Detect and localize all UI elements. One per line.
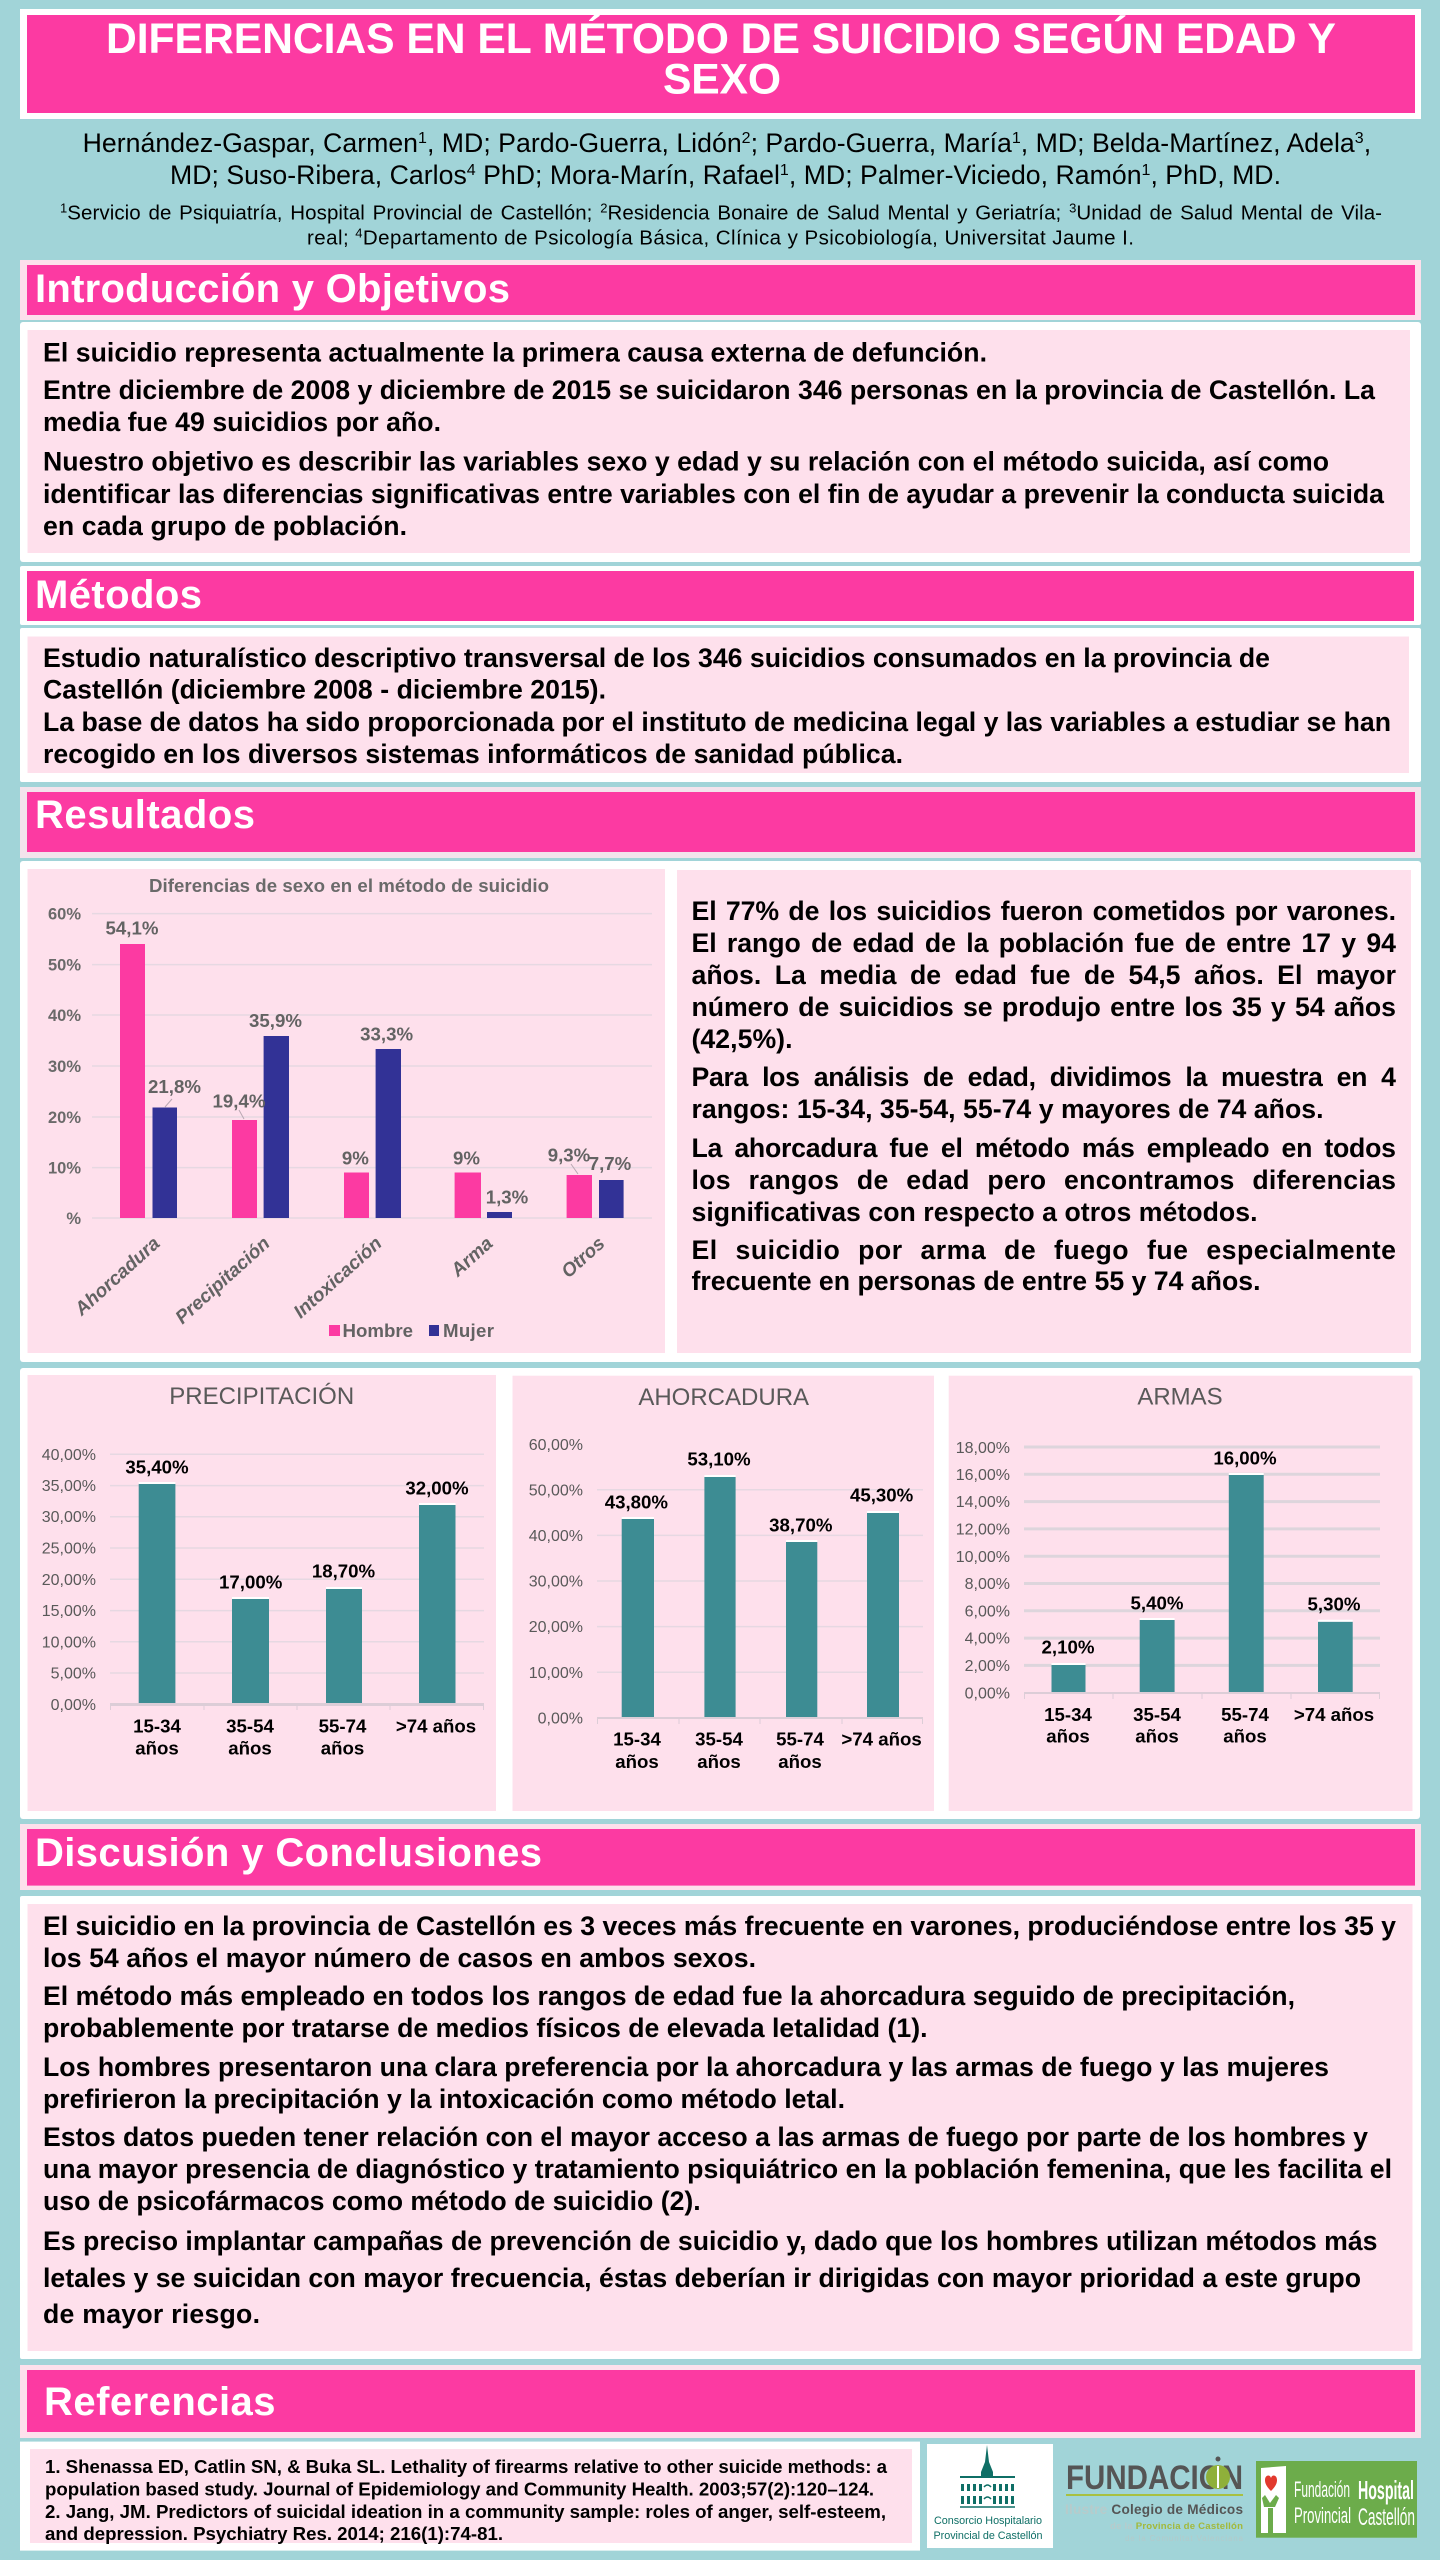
bars: hombre: [120, 944, 592, 1218]
authors: 1: [418, 130, 427, 147]
data labels: [125, 1456, 469, 1592]
y axis labels: 0,00%: [538, 1710, 583, 1728]
y axis labels: 20%: [48, 1109, 81, 1127]
heading: Introducción y Objetivos: [20, 260, 1421, 320]
authors: 1: [1012, 130, 1021, 147]
category labels: 35-54: [226, 1716, 274, 1736]
panel: introducción: media fue 49 suicidios por año.: [43, 407, 441, 437]
panel: discusión: letales y se suicidan con mayor frecuencia, éstas deberían ir dirigidas con mayor prioridad a este grupo: [43, 2263, 1361, 2293]
category labels: 55-74: [776, 1728, 824, 1750]
text block: resultados: los rangos de edad pero encontramos diferencias: [692, 1165, 1396, 1195]
panel: introducción: en cada grupo de población.: [43, 511, 407, 541]
category labels: [70, 1233, 609, 1329]
heading: Métodos: [20, 566, 1421, 625]
data labels: 2,10%: [1042, 1636, 1095, 1658]
panel: referencias: 1. Shenassa ED, Catlin SN, & Buka SL. Lethality of firearms relative to other suicide methods: a: [45, 2456, 888, 2477]
category labels: Otros: [558, 1233, 609, 1283]
authors: , MD; Belda-Martínez, Adela: [1021, 128, 1355, 158]
text block: resultados: (42,5%).: [692, 1024, 792, 1054]
category labels: Intoxicación: [290, 1233, 386, 1323]
data labels: 5,30%: [1308, 1594, 1361, 1614]
legend: [329, 1320, 494, 1341]
title banner: [20, 9, 1421, 119]
heading: Introducción y Objetivos: Introducción y Objetivos: [35, 267, 510, 311]
category labels: años: [697, 1751, 741, 1772]
data labels: 32,00%: [405, 1478, 469, 1498]
authors: , MD; Palmer-Viciedo, Ramón: [789, 160, 1142, 190]
y axis labels: 50,00%: [529, 1482, 583, 1500]
affiliations: Residencia Bonaire de Salud Mental y Geriatría;: [607, 202, 1069, 224]
data labels: 21,8%: [148, 1076, 201, 1097]
bar chart: diferencias de sexo: [28, 869, 665, 1353]
category labels: [613, 1728, 922, 1772]
data labels: 1,3%: [486, 1186, 529, 1208]
panel: referencias: [20, 2442, 920, 2551]
authors: [83, 128, 1371, 190]
panel: introducción: Entre diciembre de 2008 y diciembre de 2015 se suicidaron 346 personas en la provincia de Castellón. La: [43, 375, 1375, 405]
data labels: 43,80%: [605, 1492, 668, 1512]
authors: Hernández-Gaspar, Carmen: [83, 128, 418, 158]
y axis labels: 4,00%: [965, 1630, 1010, 1648]
data labels: [605, 1448, 914, 1536]
panel: referencias: population based study. Journal of Epidemiology and Community Health. 2003;57(2):120–124.: [45, 2478, 874, 2500]
category labels: 55-74: [319, 1716, 367, 1736]
panel: discusión: El método más empleado en todos los rangos de edad fue la ahorcadura seguido de precipitación,: [43, 1981, 1295, 2011]
y axis labels: 10%: [48, 1160, 81, 1178]
authors: 3: [1355, 130, 1364, 147]
logo: Fundación Hospital Provincial Castellón: Fundación: [1294, 2477, 1350, 2502]
panel: discusión: Los hombres presentaron una clara preferencia por la ahorcadura y las armas de fuego y las mujeres: [43, 2052, 1329, 2082]
panel: resultados background: [20, 861, 1421, 1362]
logo: Fundación Colegio de Médicos: [1065, 2456, 1244, 2543]
y axis labels: 8,00%: [965, 1576, 1010, 1593]
y axis labels: 40,00%: [529, 1528, 583, 1545]
heading: Resultados: Resultados: [35, 793, 255, 837]
y axis labels: 10,00%: [529, 1665, 583, 1682]
bars: [139, 1483, 455, 1704]
text block: resultados: [677, 870, 1411, 1353]
data labels: 17,00%: [219, 1572, 283, 1592]
y axis labels: 20,00%: [529, 1619, 583, 1636]
panel: introducción: Nuestro objetivo es describir las variables sexo y edad y su relación con el método suicida, así como: [43, 446, 1329, 476]
category labels: Arma: [446, 1233, 498, 1282]
data labels: 9,3%: [548, 1144, 591, 1166]
panel: armas chart: [949, 1376, 1412, 1811]
affiliations: 1: [60, 200, 67, 216]
chart title: PRECIPITACIÓN: [169, 1383, 354, 1410]
text block: resultados: número de suicidios se produjo entre los 35 y 54 años: [692, 992, 1396, 1022]
data labels: 9%: [453, 1148, 480, 1168]
authors: PhD; Mora-Marín, Rafael: [476, 160, 780, 190]
authors: , MD; Pardo-Guerra, Lidón: [427, 128, 742, 158]
category labels: 55-74: [1221, 1704, 1269, 1725]
category labels: años: [1135, 1726, 1179, 1746]
text block: resultados: años. La media de edad fue de 54,5 años. El mayor: [692, 960, 1396, 990]
affiliations: real;: [307, 226, 349, 250]
authors: 4: [467, 162, 476, 179]
y axis labels: 50%: [48, 956, 81, 974]
panel: discusión: Es preciso implantar campañas de prevención de suicidio y, dado que los hombres utilizan métodos más: [43, 2226, 1378, 2256]
data labels: 33,3%: [360, 1024, 413, 1044]
data labels: 38,70%: [769, 1514, 833, 1536]
legend: Hombre: [342, 1320, 413, 1341]
panel: discusión: prefirieron la precipitación y la intoxicación como método letal.: [43, 2084, 845, 2114]
panel: métodos: La base de datos ha sido proporcionada por el instituto de medicina legal y las variables a estudiar se han: [43, 707, 1391, 737]
y axis labels: 30,00%: [42, 1509, 96, 1526]
y axis labels: 40,00%: [42, 1447, 96, 1464]
panel: introducción: identificar las diferencias significativas entre variables con el fin de ayudar a prevenir la conducta suicida: [43, 479, 1384, 509]
category labels: años: [778, 1751, 822, 1772]
logo: Fundación Colegio de Médicos: de la Comunitat Valenciana: [1125, 2534, 1244, 2543]
authors: ,: [1364, 128, 1371, 158]
y axis labels: [48, 906, 81, 1228]
text block: resultados: La ahorcadura fue el método más empleado en todos: [692, 1133, 1396, 1163]
panel: introducción: El suicidio representa actualmente la primera causa externa de defunción.: [43, 338, 987, 368]
panel: discusión: uso de psicofármacos como método de suicidio (2).: [43, 2186, 701, 2216]
category labels: 15-34: [133, 1716, 181, 1736]
category labels: años: [228, 1738, 272, 1758]
logo: Consorcio Hospitalario: Consorcio Hospitalario: [934, 2515, 1042, 2527]
logo: Consorcio Hospitalario: Provincial de Castellón: [934, 2530, 1042, 2542]
authors: 1: [1142, 162, 1151, 179]
y axis labels: 40%: [48, 1007, 81, 1025]
authors: ; Pardo-Guerra, María: [751, 128, 1012, 158]
bars: [1052, 1474, 1353, 1693]
chart title: ARMAS: [1137, 1384, 1223, 1410]
data labels: 16,00%: [1213, 1448, 1277, 1468]
text block: resultados: rangos: 15-34, 35-54, 55-74 y mayores de 74 años.: [692, 1094, 1324, 1124]
y axis labels: 10,00%: [42, 1634, 96, 1652]
title banner: DIFERENCIAS EN EL MÉTODO DE SUICIDIO SEGÚN EDAD Y: [106, 14, 1336, 63]
y axis labels: 30,00%: [529, 1574, 583, 1590]
data labels: 35,9%: [249, 1010, 302, 1031]
y axis labels: 18,00%: [956, 1440, 1010, 1457]
heading: Discusión y Conclusiones: Discusión y Conclusiones: [35, 1831, 542, 1875]
data labels: 19,4%: [213, 1090, 266, 1112]
y axis labels: %: [66, 1210, 81, 1228]
authors: MD; Suso-Ribera, Carlos: [170, 160, 467, 190]
heading: Referencias: Referencias: [44, 2380, 276, 2424]
y axis labels: [42, 1447, 96, 1714]
category labels: años: [1046, 1726, 1090, 1746]
data labels: 53,10%: [687, 1448, 751, 1470]
category labels: Ahorcadura: [70, 1233, 165, 1321]
y axis labels: 2,00%: [965, 1658, 1010, 1675]
panel: métodos: recogido en los diversos sistemas informáticos de sanidad pública.: [43, 739, 903, 769]
legend: Mujer: [443, 1320, 494, 1341]
panel: discusión: de mayor riesgo.: [43, 2299, 260, 2329]
logo: Fundación Hospital Provincial Castellón: [1256, 2461, 1417, 2538]
chart title: AHORCADURA: [638, 1384, 809, 1411]
affiliations: 2: [600, 200, 607, 216]
data labels: 45,30%: [850, 1484, 914, 1506]
y axis labels: 20,00%: [42, 1572, 96, 1589]
text block: resultados: El rango de edad de la población fue de entre 17 y 94: [692, 928, 1396, 958]
y axis labels: [529, 1437, 583, 1728]
text block: resultados: frecuente en personas de entre 55 y 74 años.: [692, 1266, 1260, 1296]
data labels: 54,1%: [106, 918, 159, 938]
y axis labels: 16,00%: [956, 1467, 1010, 1484]
data labels: 18,70%: [312, 1560, 376, 1582]
y axis labels: 30%: [48, 1058, 81, 1076]
panel: discusión: El suicidio en la provincia de Castellón es 3 veces más frecuente en varones, produciéndose entre los 35 y: [43, 1911, 1396, 1941]
text block: resultados: El 77% de los suicidios fueron cometidos por varones.: [692, 896, 1396, 926]
panel: discusión: una mayor presencia de diagnóstico y tratamiento psiquiátrico en la población femenina, que les facilita el: [43, 2154, 1392, 2184]
logo: Fundación Colegio de Médicos: Ilustre Colegio de Médicos: [1065, 2502, 1243, 2517]
panel: referencias: and depression. Psychiatry Res. 2014; 216(1):74-81.: [45, 2523, 503, 2544]
text block: resultados: significativas con respecto a otros métodos.: [692, 1197, 1258, 1227]
y axis labels: 35,00%: [42, 1478, 96, 1495]
panel: métodos: [20, 628, 1421, 782]
title banner: SEXO: [663, 56, 781, 104]
affiliations: [60, 200, 1382, 250]
panel: discusión: [20, 1896, 1421, 2359]
affiliations: 3: [1069, 200, 1076, 216]
panel: introducción: [20, 322, 1421, 562]
y axis labels: 60,00%: [529, 1437, 583, 1454]
affiliations: 4: [355, 226, 362, 240]
data labels: [106, 918, 632, 1208]
panel: precipitación chart: [28, 1375, 496, 1811]
heading: Referencias: [20, 2365, 1421, 2438]
bars: [622, 1476, 899, 1718]
data labels: [1042, 1448, 1361, 1658]
y axis labels: 25,00%: [42, 1540, 96, 1558]
chart title: Diferencias de sexo en el método de suicidio: [149, 875, 549, 896]
data labels: 5,40%: [1131, 1592, 1184, 1614]
logo: Fundación Colegio de Médicos: FUNDACION: [1066, 2459, 1243, 2497]
category labels: años: [1223, 1726, 1267, 1746]
category labels: >74 años: [1294, 1704, 1374, 1725]
category labels: 35-54: [1133, 1704, 1181, 1725]
authors: 1: [780, 162, 789, 179]
category labels: 15-34: [613, 1728, 661, 1750]
y axis labels: 0,00%: [51, 1697, 96, 1714]
y axis labels: 12,00%: [956, 1522, 1010, 1538]
category labels: 35-54: [695, 1728, 743, 1750]
category labels: Precipitación: [172, 1233, 274, 1329]
affiliations: Servicio de Psiquiatría, Hospital Provincial de Castellón;: [67, 202, 600, 224]
category labels: [133, 1716, 476, 1758]
panel: ahorcadura chart: [512, 1376, 934, 1811]
y axis labels: 6,00%: [965, 1604, 1010, 1620]
category labels: años: [615, 1751, 659, 1772]
data labels: 9%: [342, 1148, 369, 1168]
heading: Resultados: [20, 787, 1421, 858]
y axis labels: [956, 1440, 1010, 1702]
panel: charts row background: [20, 1368, 1420, 1819]
category labels: >74 años: [841, 1728, 922, 1750]
y axis labels: 0,00%: [965, 1686, 1010, 1702]
panel: referencias: 2. Jang, JM. Predictors of suicidal ideation in a community sample: roles of anger, self-esteem,: [45, 2501, 886, 2522]
y axis labels: 5,00%: [51, 1666, 96, 1682]
category labels: >74 años: [396, 1716, 476, 1736]
affiliations: Departamento de Psicología Básica, Clínica y Psicobiología, Universitat Jaume I.: [363, 226, 1134, 250]
panel: discusión: probablemente por tratarse de medios físicos de elevada letalidad (1).: [43, 2013, 928, 2043]
y axis labels: 60%: [48, 906, 81, 924]
category labels: [1044, 1704, 1374, 1746]
panel: discusión: Estos datos pueden tener relación con el mayor acceso a las armas de fuego por parte de los hombres y: [43, 2122, 1368, 2152]
panel: métodos: Estudio naturalístico descriptivo transversal de los 346 suicidios consumados en la provincia de: [43, 643, 1270, 673]
text block: resultados: El suicidio por arma de fuego fue especialmente: [692, 1235, 1396, 1265]
data labels: 7,7%: [589, 1153, 632, 1174]
heading: Discusión y Conclusiones: [20, 1824, 1421, 1890]
bars: mujer: [152, 1036, 624, 1218]
logo: Consorcio Hospitalario: [927, 2444, 1053, 2548]
data labels: 35,40%: [125, 1456, 189, 1478]
panel: discusión: los 54 años el mayor número de casos en ambos sexos.: [43, 1943, 756, 1973]
authors: 2: [742, 130, 751, 147]
y axis labels: 14,00%: [956, 1494, 1010, 1511]
category labels: años: [321, 1738, 364, 1758]
authors: , PhD, MD.: [1150, 160, 1281, 190]
category labels: 15-34: [1044, 1704, 1092, 1725]
heading: Métodos: Métodos: [35, 573, 202, 617]
text block: resultados: Para los análisis de edad, dividimos la muestra en 4: [692, 1062, 1396, 1092]
affiliations: Unidad de Salud Mental de Vila-: [1076, 202, 1382, 224]
logo: Fundación Hospital Provincial Castellón: Provincial: [1294, 2503, 1351, 2528]
logo: Fundación Colegio de Médicos: de la Provincia de Castellón: [1110, 2521, 1243, 2532]
y axis labels: 10,00%: [956, 1549, 1010, 1566]
panel: métodos: Castellón (diciembre 2008 - diciembre 2015).: [43, 675, 606, 705]
category labels: años: [135, 1738, 179, 1758]
y axis labels: 15,00%: [42, 1603, 96, 1620]
